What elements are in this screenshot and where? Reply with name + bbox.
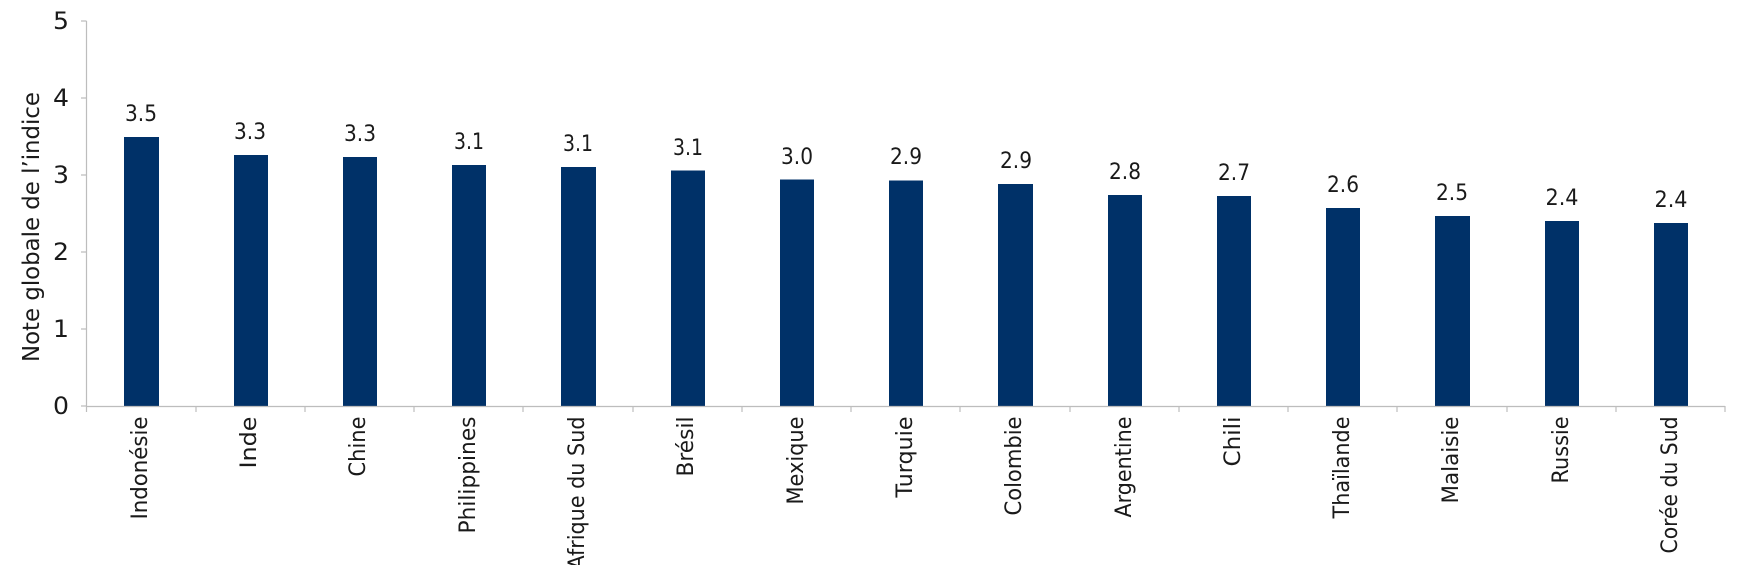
y-axis scale labels: 2: [53, 238, 69, 266]
value labels: [125, 101, 1688, 213]
y-axis scale labels: 4: [53, 84, 69, 112]
category labels: Philippines: [456, 416, 481, 534]
value labels: 3.1: [673, 135, 703, 161]
value labels: 3.5: [125, 101, 157, 127]
value labels: 3.0: [781, 144, 813, 170]
y-axis title: Note globale de l’indice: [19, 92, 45, 362]
value labels: 3.3: [344, 121, 376, 147]
category labels: Malaisie: [1439, 416, 1464, 504]
value labels: 3.1: [454, 129, 484, 155]
category labels: Thaïlande: [1330, 416, 1355, 519]
category labels: Indonésie: [128, 416, 153, 520]
category labels: Chili: [1221, 416, 1246, 466]
value labels: 3.3: [234, 119, 266, 145]
value labels: 2.4: [1654, 187, 1688, 213]
y-axis scale labels: 1: [53, 315, 69, 343]
category labels: Brésil: [674, 416, 699, 476]
x axis with ticks: [86, 406, 1725, 412]
value labels: 2.4: [1546, 185, 1578, 211]
category labels: Chine: [346, 416, 371, 476]
y-axis scale labels: 5: [53, 7, 69, 35]
y-axis scale labels: 3: [53, 161, 69, 189]
category labels: Argentine: [1112, 416, 1137, 518]
y axis with ticks: [81, 21, 86, 406]
y-axis scale labels: [53, 7, 69, 420]
category labels: Colombie: [1002, 416, 1027, 516]
bars: [124, 137, 1688, 406]
category labels: [128, 416, 1683, 565]
value labels: 2.9: [890, 144, 922, 170]
category labels: Russie: [1549, 416, 1574, 484]
value labels: 2.5: [1436, 180, 1468, 206]
value labels: 2.7: [1218, 160, 1250, 186]
value labels: 2.6: [1327, 172, 1359, 198]
value labels: 3.1: [563, 131, 593, 157]
category labels: Turquie: [893, 416, 918, 499]
category labels: Mexique: [784, 416, 809, 504]
y-axis scale labels: 0: [53, 392, 69, 420]
category labels: Inde: [237, 416, 262, 468]
value labels: 2.8: [1109, 159, 1141, 185]
category labels: Corée du Sud: [1658, 416, 1683, 554]
category labels: Afrique du Sud: [565, 416, 590, 565]
value labels: 2.9: [1000, 148, 1032, 174]
